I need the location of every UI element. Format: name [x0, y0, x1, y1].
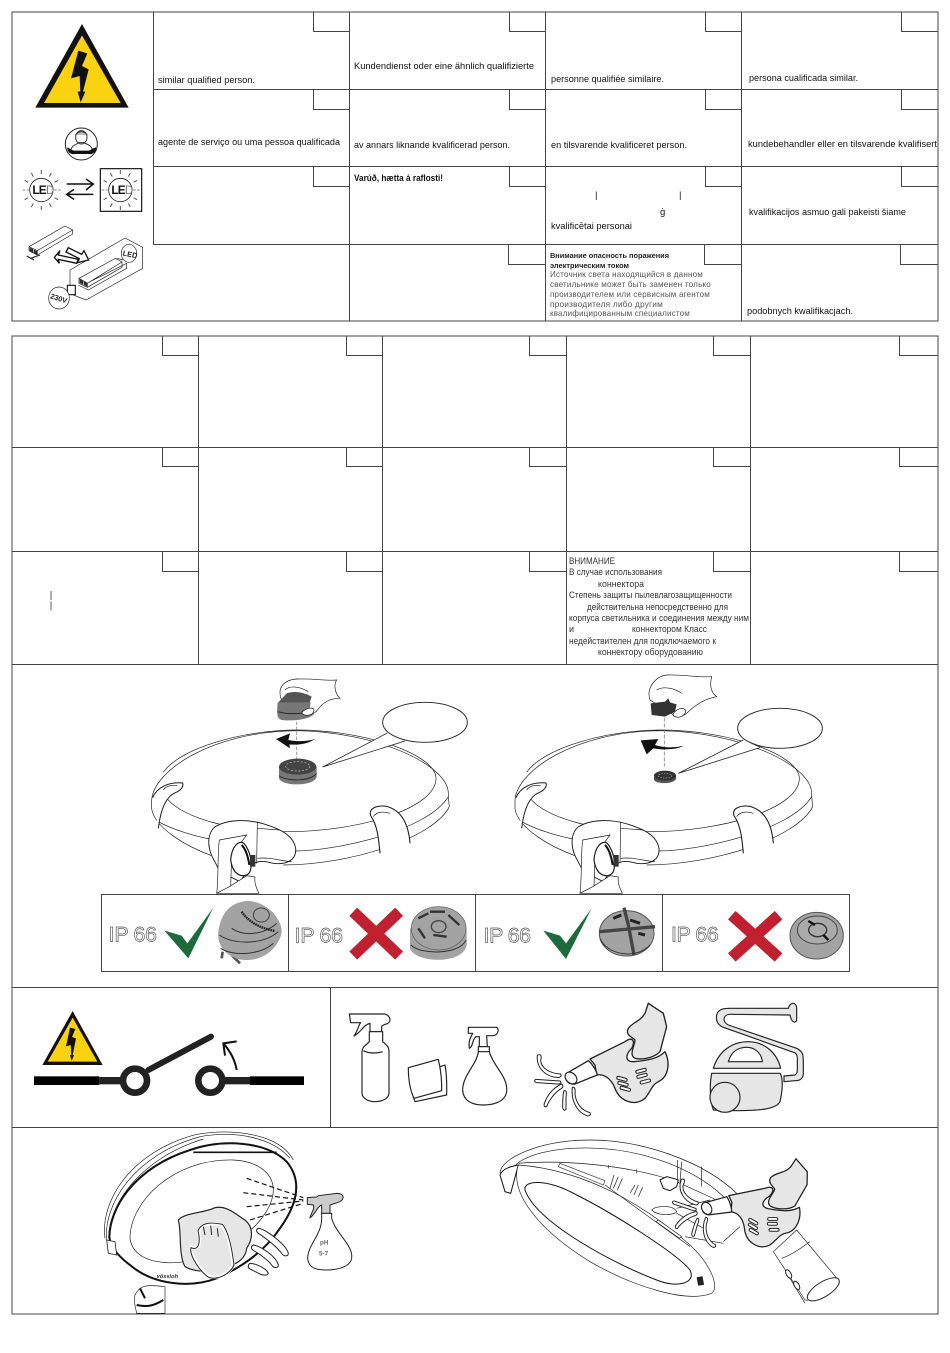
top warning table	[12, 12, 938, 321]
icon: vacuum cleaner	[710, 1003, 803, 1112]
icon: spray bottle pH 5-7	[307, 1193, 352, 1270]
icon: driver replacement: LED	[122, 248, 138, 260]
luminaire shell	[104, 1132, 296, 1313]
icon: service technician	[65, 128, 97, 160]
IP 66 compatibility table	[102, 894, 850, 972]
icon: driver replacement	[27, 226, 143, 309]
air lines	[248, 1228, 288, 1275]
icon: hand with connector	[277, 679, 340, 760]
panel: left warning icons	[23, 24, 143, 309]
text block: russian connector note: и	[569, 624, 574, 634]
air hose	[773, 1230, 843, 1305]
luminaire open underside	[500, 1140, 740, 1296]
text block: russian connector note: недействителен для подключаемого к	[569, 636, 716, 646]
icon: electric hazard triangle	[35, 24, 129, 108]
arrow	[641, 739, 684, 754]
text block: multilingual qualified person notes: podobnych kwalifikacjach.	[747, 306, 853, 317]
IP 66 allowed: small connector	[484, 908, 655, 959]
text block: multilingual qualified person notes: kundebehandler eller en tilsvarende kvalifisert	[748, 139, 937, 150]
IP 66 allowed: small connector: IP 66	[484, 924, 533, 948]
icon: small socket	[654, 771, 676, 783]
IP 66 not allowed: connector: IP 66	[295, 924, 345, 948]
text block: russian warning: квалифицированным специалистом	[550, 309, 690, 318]
switch diagram	[34, 1037, 304, 1093]
callout	[323, 702, 467, 767]
text block: russian warning: производителем или сервисным агентом	[550, 290, 710, 299]
text block: russian warning: производителя либо другим	[550, 300, 663, 309]
callout	[678, 708, 822, 773]
icon: driver replacement: 230V	[49, 292, 68, 305]
icon: spray bottle round	[463, 1027, 507, 1105]
text block: multilingual qualified person notes: av annars liknande kvalificerad person.	[354, 140, 510, 151]
arrow	[276, 733, 315, 748]
text block: multilingual qualified person notes: en tilsvarende kvalificeret person.	[551, 140, 687, 151]
text block: russian connector note: коннектором Класс	[632, 624, 707, 634]
text block: russian warning: Источник света находящийся в данном	[550, 270, 703, 279]
icon: socket	[279, 759, 317, 784]
text block: russian connector note: коннектора	[598, 579, 644, 589]
text block: russian connector note: В случае использования	[569, 567, 662, 577]
icon: cloth	[408, 1059, 447, 1102]
text block: multilingual qualified person notes: personne qualifiée similaire.	[551, 74, 664, 85]
text block: russian warning	[550, 251, 711, 318]
text block: russian warning: светильнике может быть заменен только	[550, 280, 711, 289]
icon: LED swap	[23, 169, 142, 211]
text block: multilingual qualified person notes: persona cualificada similar.	[749, 73, 858, 84]
luminaire with large connector	[152, 679, 467, 893]
luminaire shell: vössloh	[157, 1274, 179, 1280]
text block: russian connector note: корпуса светильника и соединения между ним	[569, 613, 749, 623]
panel: cleaning tools	[349, 1003, 803, 1116]
IP 66 not allowed: small connector: IP 66	[671, 922, 720, 946]
text block: multilingual qualified person notes: agente de serviço ou uma pessoa qualificada	[158, 137, 341, 148]
text block: russian warning: электрическим током	[550, 261, 629, 270]
text block: multilingual qualified person notes: |	[679, 190, 681, 201]
panel: power off switch	[34, 1011, 304, 1093]
text block: multilingual qualified person notes: kvalifikacijos asmuo gali pakeisti šiame	[749, 207, 906, 218]
IP 66 not allowed: connector	[295, 907, 467, 960]
icon: LED swap: LED	[32, 184, 54, 197]
installation table	[12, 336, 938, 1314]
icon: blower with cloth	[664, 1131, 814, 1267]
text block: multilingual qualified person notes: |	[595, 190, 597, 201]
cloth and hand	[178, 1207, 251, 1278]
text block: russian connector note: Степень защиты пылевлагозащищенности	[569, 590, 732, 600]
spray dashes	[243, 1178, 303, 1220]
arrow	[223, 1041, 237, 1070]
text block: multilingual qualified person notes: similar qualified person.	[158, 75, 255, 86]
text block: multilingual qualified person notes	[158, 61, 937, 317]
text block: russian connector note: действительна непосредственно для	[587, 602, 728, 612]
luminaire with small connector	[515, 675, 822, 893]
text block: multilingual qualified person notes: kvalificētai personai	[551, 221, 632, 232]
IP 66 allowed: connector: IP 66	[109, 922, 159, 946]
text block: multilingual qualified person notes: Varúð, hætta á raflosti!	[354, 173, 443, 184]
icon: air blower with cloth	[535, 1003, 668, 1116]
icon: spray bottle pH 5-7: 5-7	[319, 1250, 329, 1257]
text block: multilingual qualified person notes: Kundendienst oder eine ähnlich qualifizierte	[354, 61, 534, 72]
text block: russian warning: Внимание опасность поражения	[550, 251, 669, 260]
panel dividers for maintenance	[12, 987, 938, 1128]
icon: hazard triangle small	[42, 1011, 103, 1065]
illustration: wiping luminaire with pH neutral spray	[104, 1132, 352, 1313]
text block: russian connector note: ВНИМАНИЕ	[569, 556, 615, 566]
text block: multilingual qualified person notes: ģ	[660, 207, 665, 218]
IP 66 allowed: connector	[109, 901, 282, 963]
icon: hand with small connector	[649, 675, 717, 767]
text block: russian connector note	[569, 556, 749, 657]
icon: spray bottle pH 5-7: pH	[320, 1239, 329, 1246]
text block: russian connector note: коннектору оборудованию	[598, 647, 703, 657]
icon: spray bottle tall	[349, 1014, 390, 1102]
illustration: blowing dust inside luminaire	[500, 1131, 843, 1305]
IP 66 not allowed: small connector	[671, 912, 843, 959]
